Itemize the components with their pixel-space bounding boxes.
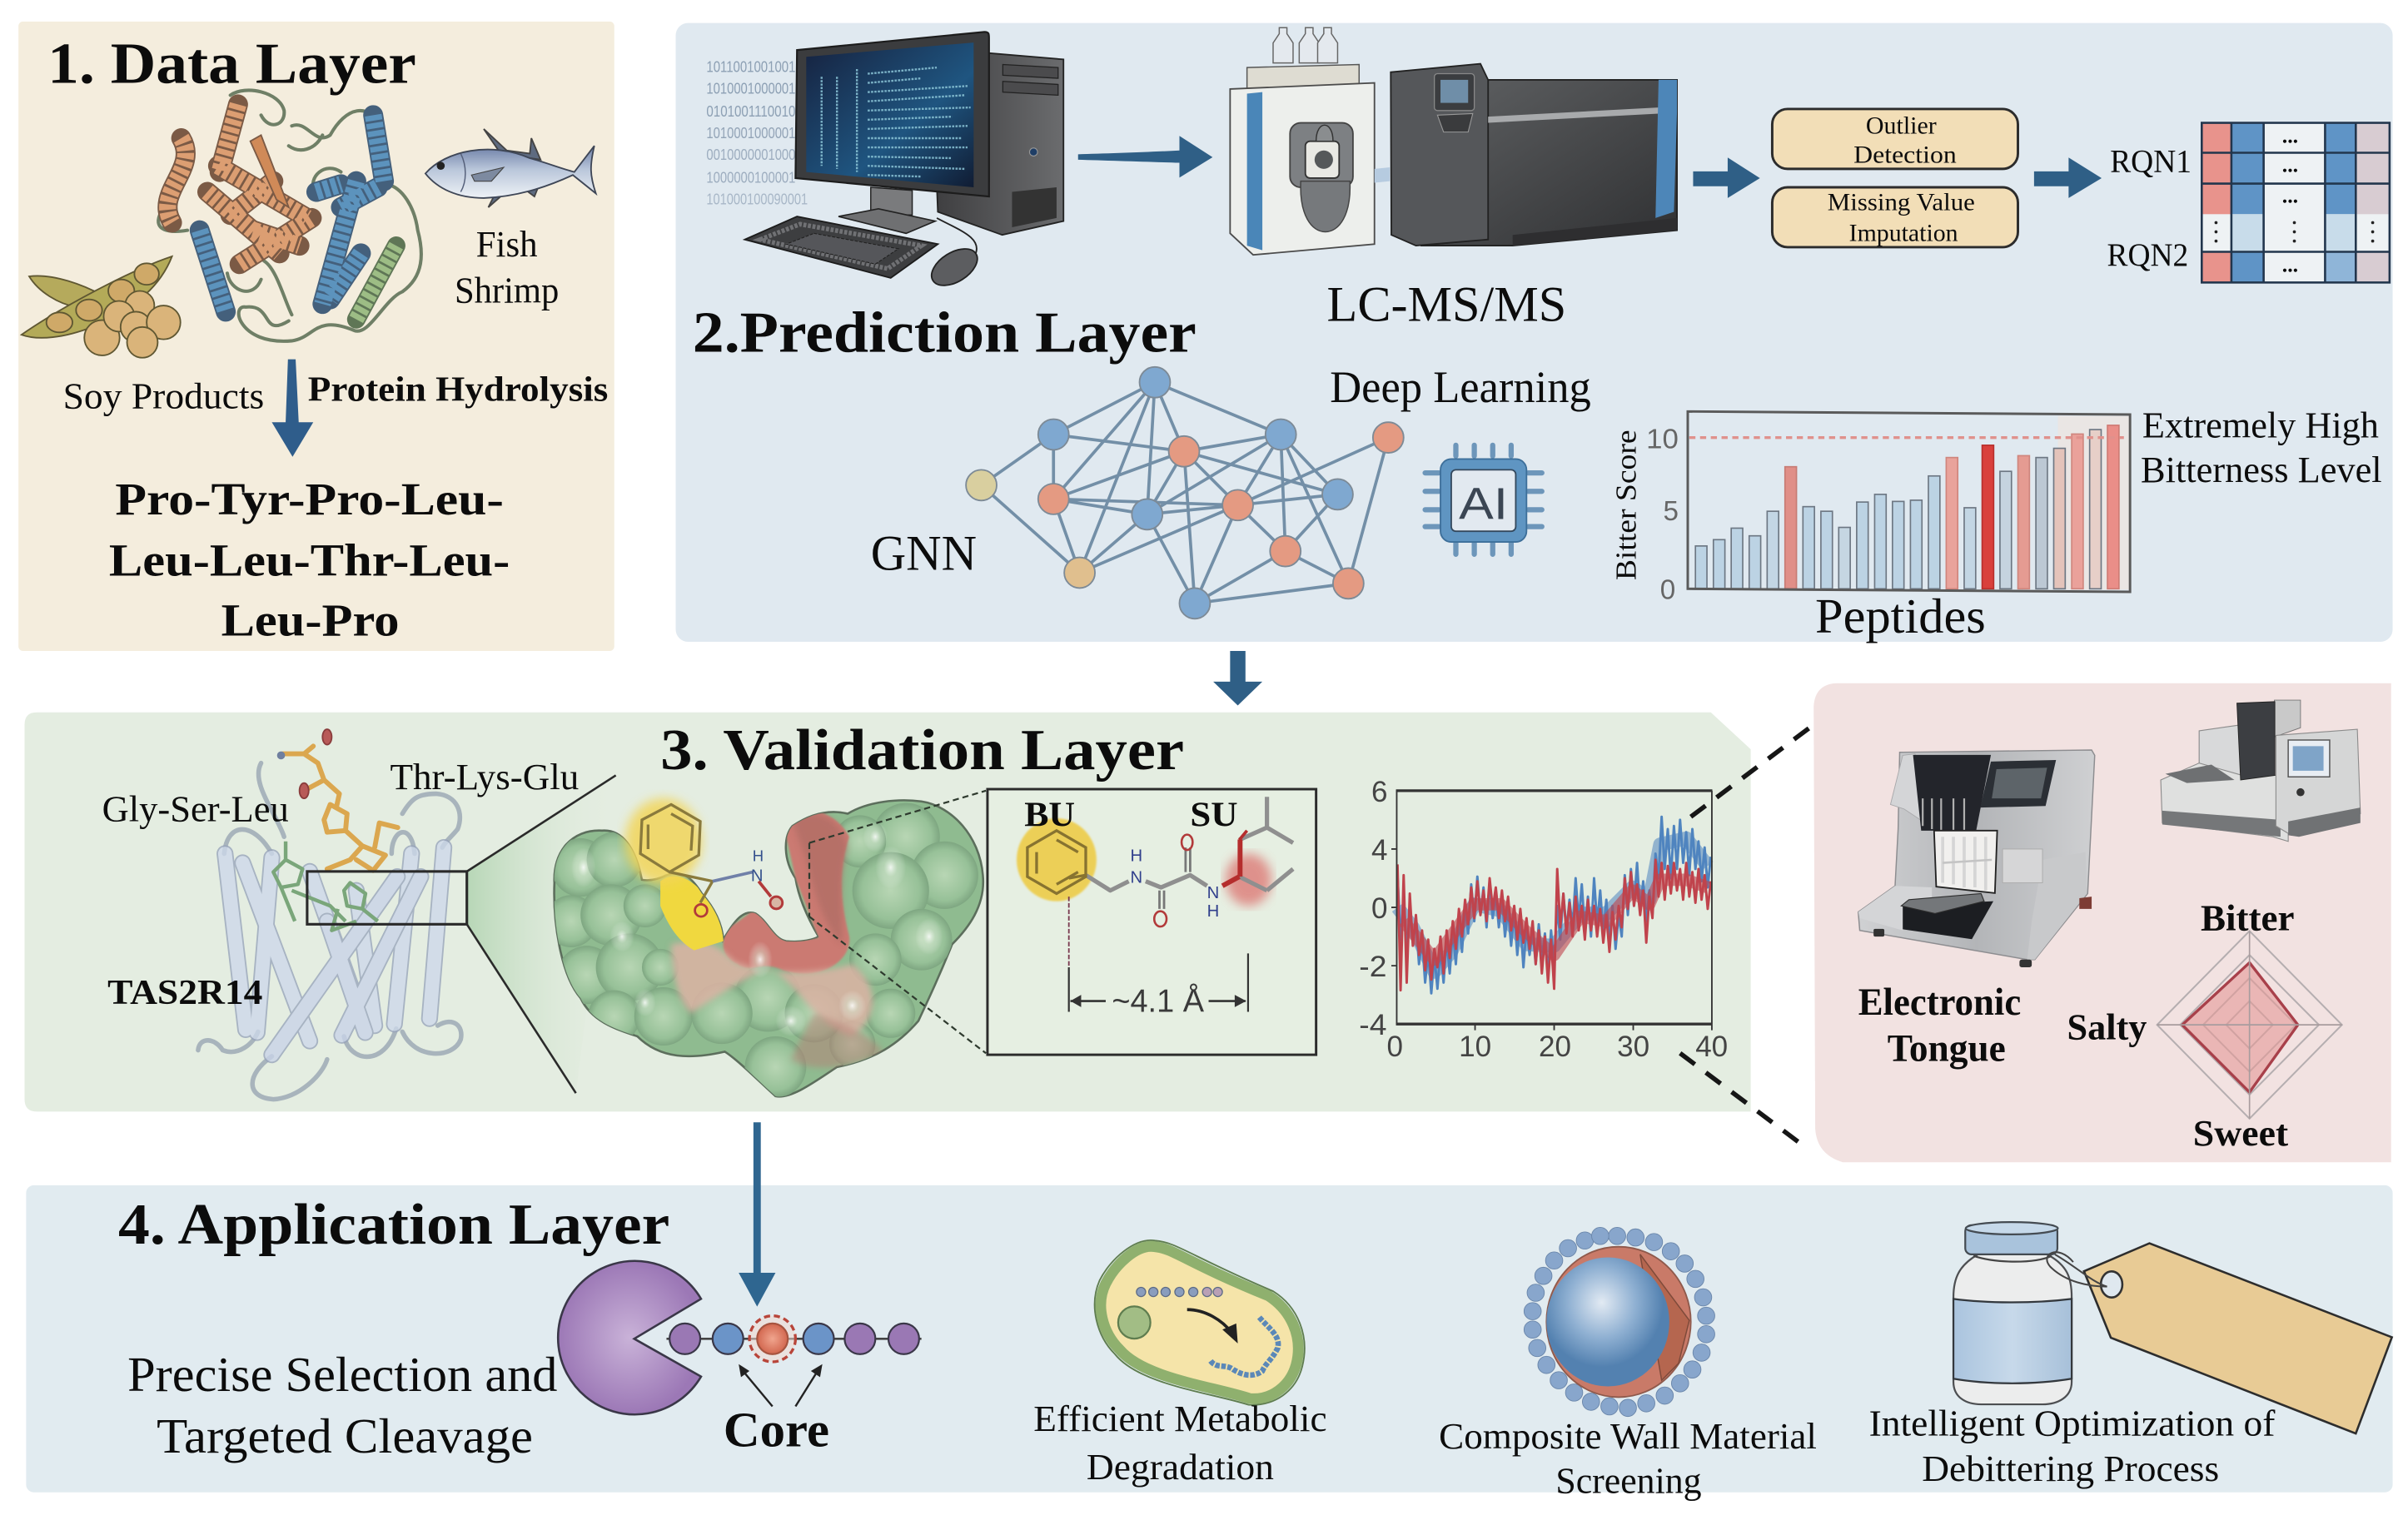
label: Salty: Salty [2067, 1007, 2147, 1048]
chart: bitter score bars: Bitter Score [1609, 430, 1642, 580]
label: BU: BU [1024, 795, 1075, 834]
icon: protein ribbon structure [158, 90, 421, 341]
binary digits [706, 58, 808, 207]
label: RQN1: RQN1 [2110, 144, 2192, 180]
icon: bacterial cell [1095, 1240, 1305, 1405]
inset: molecule diagram: N [1207, 884, 1219, 902]
arrow: computer to LC-MS [1078, 136, 1212, 177]
box: outlier detection: Outlier [1866, 112, 1937, 139]
panel: sensory validation [1813, 683, 2391, 1162]
chart: RMSD line plot: 0 [1386, 1031, 1403, 1063]
label: Deep Learning: Deep Learning [1330, 362, 1591, 412]
inset: molecule diagram: H [1207, 902, 1219, 921]
chart: RMSD line plot: 20 [1539, 1031, 1571, 1063]
text: precise selection and targeted cleavage: Targeted Cleavage [157, 1408, 533, 1463]
inset: molecule diagram: N [1130, 869, 1142, 887]
chart: RMSD line plot: 6 [1371, 776, 1388, 808]
label: Composite Wall Material Screening: Composite Wall Material [1439, 1416, 1817, 1457]
chart: bitter score bars: 10 [1646, 425, 1679, 455]
distance marker [1069, 897, 1248, 1019]
icon: LC-MS/MS instrument [1230, 27, 1677, 255]
label: Composite Wall Material Screening: Screening [1555, 1461, 1702, 1502]
label: Extremely High Bitterness Level: Extremely High [2142, 405, 2379, 446]
icon: peptide chain [666, 1316, 922, 1362]
icon: AI chip: AI [1459, 479, 1508, 529]
chart: RMSD line plot: 30 [1617, 1031, 1649, 1063]
chart: RMSD line plot: 10 [1459, 1031, 1491, 1063]
label: Peptides: Peptides [1815, 589, 1986, 643]
ligand: orange peptide [282, 746, 398, 871]
chart: RMSD line plot [1359, 776, 1728, 1063]
label: SU: SU [1190, 795, 1238, 834]
dashed callout lines to sensory panel [1680, 725, 1813, 1145]
arrows: core pointers [739, 1364, 823, 1406]
icon: benchtop analyser [2161, 700, 2361, 842]
panel: data layer [18, 22, 614, 651]
binary digits: 0010000001000 [706, 146, 795, 163]
peptide sequence: Pro-Tyr-Pro-Leu- [115, 474, 504, 524]
data matrix: ... [2282, 124, 2298, 148]
binary digits: 1000000100001 [706, 168, 795, 186]
arrow: validation to application [739, 1122, 775, 1307]
box: missing value imputation [1772, 187, 2018, 247]
label: Efficient Metabolic Degradation: Efficient Metabolic [1033, 1398, 1327, 1439]
text: precise selection and targeted cleavage: Precise Selection and [127, 1347, 558, 1402]
chart: RMSD line plot: 40 [1695, 1031, 1728, 1063]
label: Soy Products: Soy Products [63, 376, 264, 417]
binary digits: 1011001001001 [706, 58, 795, 76]
chart: bitter score bars [1609, 411, 2130, 605]
panel: validation layer [25, 713, 1751, 1111]
label: Electronic Tongue: Electronic [1858, 981, 2021, 1023]
label: Intelligent Optimization of Debittering Process: Debittering Process [1922, 1448, 2219, 1489]
label: Intelligent Optimization of Debittering Process: Intelligent Optimization of [1869, 1403, 2276, 1444]
label: Fish: Fish [476, 224, 538, 265]
icon: TAS2R14 receptor [198, 729, 461, 1100]
box: missing value imputation: Missing Value [1828, 190, 1975, 216]
icon: desktop computer [745, 32, 1063, 293]
heading: 2.Prediction Layer: 2.Prediction Layer [693, 301, 1197, 365]
peptide sequence: Leu-Pro [221, 595, 400, 646]
data matrix [2202, 123, 2390, 282]
binary digits: 1010001000001 [706, 124, 795, 142]
icon: AI chip [1425, 445, 1542, 554]
box: missing value imputation: Imputation [1849, 221, 1958, 247]
label: Extremely High Bitterness Level: Bitterness Level [2141, 450, 2382, 490]
icon: tuna fish [425, 129, 596, 207]
peptide sequence [109, 474, 510, 646]
label: TAS2R14: TAS2R14 [107, 973, 262, 1012]
label: Extremely High Bitterness Level [2141, 405, 2382, 490]
binary digits: 0101001110010 [706, 102, 795, 120]
binary digits: 1010001000001 [706, 80, 795, 97]
dashed guide lines to inset [809, 791, 986, 1053]
heading: 1. Data Layer: 1. Data Layer [47, 32, 416, 97]
label: Efficient Metabolic Degradation: Degradation [1087, 1447, 1274, 1488]
label: Core: Core [724, 1402, 829, 1457]
distance marker: ~4.1 Å [1112, 982, 1204, 1019]
data matrix: ... [2282, 183, 2298, 207]
heading: 3. Validation Layer: 3. Validation Layer [660, 718, 1184, 782]
label: GNN: GNN [871, 525, 977, 581]
arrow: to preprocessing [1693, 157, 1760, 198]
icon: bottle with tag [1953, 1222, 2392, 1433]
data matrix: ... [2282, 252, 2298, 276]
chart: RMSD line plot: 0 [1371, 892, 1388, 925]
label: Intelligent Optimization of Debittering Process [1869, 1403, 2276, 1489]
chart: bitter score bars: 5 [1663, 496, 1679, 527]
label: Efficient Metabolic Degradation [1033, 1398, 1327, 1488]
arrow: prediction to validation [1213, 651, 1262, 705]
selection box and zoom lines [307, 775, 616, 1093]
label: Sweet: Sweet [2193, 1113, 2288, 1154]
peptide sequence: Leu-Leu-Thr-Leu- [109, 535, 510, 586]
label: Gly-Ser-Leu: Gly-Ser-Leu [102, 789, 289, 830]
inset: molecule diagram: H [1130, 847, 1142, 866]
label: Shrimp: Shrimp [455, 270, 559, 310]
label: RQN2: RQN2 [2107, 237, 2188, 273]
box: outlier detection [1772, 109, 2018, 169]
heading: 4. Application Layer: 4. Application Layer [118, 1193, 669, 1257]
chart: taste radar [2157, 931, 2342, 1119]
icon: protease pacman [558, 1261, 701, 1414]
label: Electronic Tongue: Tongue [1888, 1026, 2006, 1069]
box: outlier detection: Detection [1853, 142, 1957, 169]
text: precise selection and targeted cleavage [127, 1347, 558, 1463]
label: Electronic Tongue [1858, 981, 2021, 1069]
chart: RMSD line plot: 4 [1371, 834, 1388, 867]
label: Bitter: Bitter [2201, 898, 2295, 939]
icon: molecular surface pocket: N [751, 867, 764, 886]
chart: GNN network graph [966, 367, 1404, 618]
label: LC-MS/MS: LC-MS/MS [1327, 276, 1566, 332]
icon: soybeans and pods [22, 256, 181, 358]
label: Protein Hydrolysis: Protein Hydrolysis [308, 370, 608, 409]
chart: RMSD line plot: -2 [1359, 951, 1386, 983]
binary digits: 101000100090001 [706, 190, 808, 207]
icon: molecular surface pocket: H [753, 847, 764, 865]
zoom wedge [467, 775, 616, 1093]
label: Composite Wall Material Screening [1439, 1416, 1817, 1502]
data matrix: ... [2282, 153, 2298, 177]
icon: microcapsule [1524, 1227, 1714, 1417]
label: Thr-Lys-Glu: Thr-Lys-Glu [390, 757, 579, 797]
chart: bitter score bars: 0 [1660, 574, 1675, 605]
panel: prediction layer [676, 23, 2393, 643]
icon: molecular surface pocket [545, 798, 983, 1098]
chart: RMSD line plot: -4 [1359, 1009, 1386, 1041]
inset: molecule diagram [988, 789, 1316, 1055]
arrow: protein hydrolysis down [271, 360, 313, 457]
arrow: to matrix [2034, 157, 2102, 198]
icon: electronic tongue machine [1858, 750, 2095, 967]
panel: application layer [26, 1185, 2393, 1502]
